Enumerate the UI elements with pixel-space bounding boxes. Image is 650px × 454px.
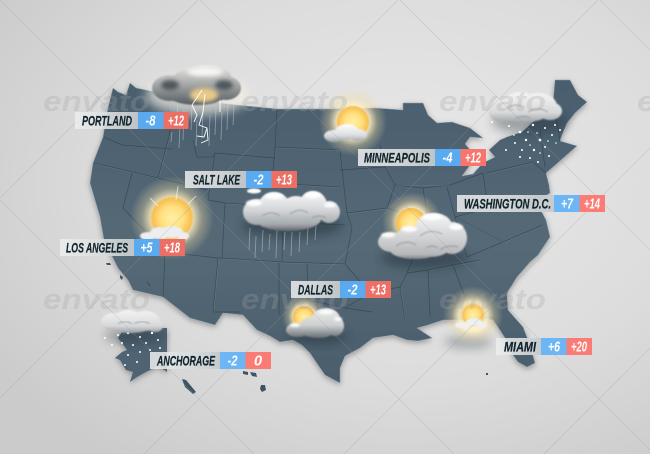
storm rain <box>171 102 234 148</box>
lightning <box>192 90 220 143</box>
watermark text: envato <box>43 284 150 316</box>
watermark text: envato <box>43 86 150 118</box>
label: Salt Lake: SALT LAKE <box>193 172 240 188</box>
snowflakes <box>491 116 561 163</box>
label: Washington D.C.: +7 <box>561 196 574 212</box>
weather: central sun and cloud <box>378 192 469 269</box>
label: Anchorage: ANCHORAGE <box>156 352 215 368</box>
label: Dallas: DALLAS <box>298 282 333 298</box>
label: Dallas: -2 <box>348 282 358 298</box>
label: Portland <box>75 112 188 130</box>
snow cloud <box>101 310 163 333</box>
label: Anchorage: 0 <box>254 354 262 370</box>
weather: Portland thunderstorm <box>146 65 250 148</box>
label: Anchorage <box>150 352 271 370</box>
weather: Miami sun and cloud <box>443 286 503 349</box>
alaskan and hawaiian islands <box>106 263 488 394</box>
weather: Dallas sun and cloud <box>282 294 348 344</box>
label: Washington D.C.: WASHINGTON D.C. <box>464 196 551 212</box>
label: Los Angeles: +5 <box>140 240 153 256</box>
watermark text: envato <box>241 284 348 316</box>
label: Miami: MIAMI <box>504 338 537 354</box>
snowflakes <box>104 328 161 366</box>
label: Los Angeles: +18 <box>164 240 181 256</box>
label: Los Angeles: LOS ANGELES <box>66 240 128 256</box>
weather: Alaska snow cloud <box>101 310 165 366</box>
label: Salt Lake: +13 <box>276 172 292 188</box>
cloud highlights <box>381 214 463 238</box>
weather: Salt Lake rain cloud <box>242 188 342 258</box>
snow cloud <box>488 92 562 122</box>
label: Salt Lake <box>185 171 297 188</box>
rain cloud <box>243 188 340 231</box>
cloud highlights <box>246 192 336 208</box>
watermark text: envato <box>439 86 546 118</box>
label: Minneapolis <box>358 149 486 166</box>
weather: north-east snow cloud <box>488 92 568 163</box>
label: Anchorage: -2 <box>228 354 238 370</box>
label: Portland: -8 <box>146 114 156 130</box>
label: Washington D.C.: +14 <box>584 196 600 212</box>
label: Dallas: +13 <box>370 282 386 298</box>
alaska <box>115 328 167 382</box>
state borders <box>94 105 560 321</box>
watermark text <box>43 86 650 316</box>
label: Miami <box>496 338 592 356</box>
map of the United States <box>90 80 587 394</box>
weather: Minneapolis sun and cloud <box>319 88 387 156</box>
label: Salt Lake: -2 <box>254 172 264 188</box>
label: Minneapolis: +12 <box>465 150 481 166</box>
watermark text: envato <box>439 284 546 316</box>
watermark text: envato <box>241 86 348 118</box>
label: Dallas <box>291 281 391 298</box>
label: Portland: +12 <box>168 114 184 130</box>
label: Portland: PORTLAND <box>82 112 132 128</box>
label: Miami: +6 <box>548 340 561 356</box>
label: Miami: +20 <box>571 340 587 356</box>
weather: Los Angeles sun and cloud <box>130 176 214 260</box>
sun rays <box>150 186 196 206</box>
contiguous states shape <box>90 80 587 383</box>
rain <box>249 226 316 258</box>
storm cloud <box>152 65 241 105</box>
label: Minneapolis: -4 <box>442 150 452 166</box>
label: Minneapolis: MINNEAPOLIS <box>364 150 430 166</box>
